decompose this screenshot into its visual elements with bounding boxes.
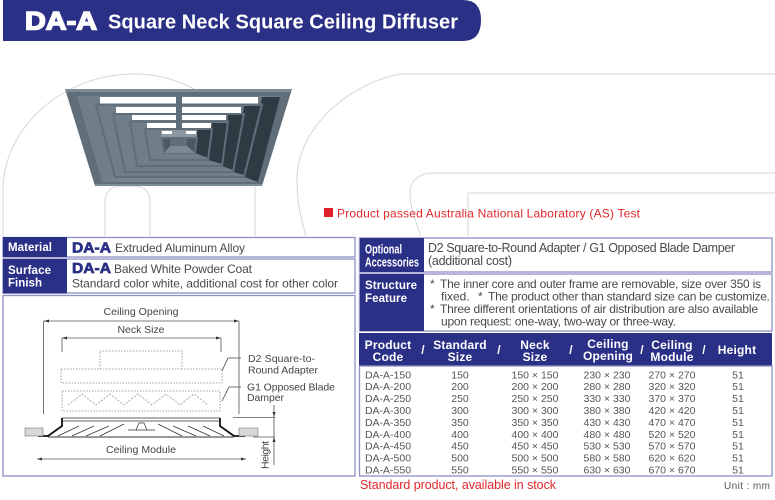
table body: 230 × 230 — [583, 370, 631, 382]
stock note: Standard product, available in stock — [360, 478, 557, 492]
panel: material: DA-A — [72, 240, 111, 256]
product illustration: square ceiling diffuser — [65, 89, 292, 186]
title banner: Square Neck Square Ceiling Diffuser — [108, 12, 458, 34]
title banner: DA-A — [25, 8, 97, 36]
table body: 400 × 400 — [511, 429, 559, 441]
panel: surface finish — [3, 259, 355, 294]
table header: Code — [373, 350, 404, 364]
table header: Ceiling — [587, 337, 629, 351]
panel: material: Extruded Aluminum Alloy — [115, 241, 245, 255]
title banner — [3, 0, 481, 41]
table body: 370 × 370 — [648, 393, 696, 405]
table header: Size — [523, 350, 548, 364]
table body: 250 × 250 — [511, 393, 559, 405]
panel: material — [3, 237, 355, 257]
neck size dimension — [62, 324, 221, 352]
panel: optional accessories: (additional cost) — [428, 254, 512, 268]
panel: structure feature: The inner core and outer frame are removable, size over 350 is — [440, 277, 761, 291]
table body: 580 × 580 — [583, 452, 631, 464]
table body: 550 — [451, 464, 469, 476]
table header — [359, 333, 772, 366]
table body: 51 — [732, 381, 744, 393]
panel: structure feature: * — [430, 302, 435, 316]
table header: Neck — [520, 338, 550, 352]
panel: structure feature: The product other than standard size can be customize. — [488, 290, 770, 304]
callout: G1 damper: G1 Opposed Blade — [247, 382, 335, 394]
table body: 380 × 380 — [583, 405, 631, 417]
table header: Module — [650, 350, 694, 364]
ceiling module dimension — [37, 444, 246, 460]
panel: material: Material — [8, 242, 52, 254]
table body: 250 — [451, 393, 469, 405]
neck size dimension: Neck Size — [118, 324, 165, 336]
D2 adapter dashed outline — [61, 351, 222, 383]
table body: 570 × 570 — [648, 440, 696, 452]
table body: 51 — [732, 452, 744, 464]
table body: 420 × 420 — [648, 405, 696, 417]
panel: structure feature: Three different orientations of air distribution are also available — [440, 302, 758, 316]
panel: optional accessories: Optional — [365, 242, 402, 256]
specification table — [359, 333, 772, 476]
panel: surface finish: Surface — [8, 265, 51, 277]
height dimension — [233, 405, 276, 469]
table body — [360, 366, 772, 476]
table body: 350 × 350 — [511, 417, 559, 429]
table body: 270 × 270 — [648, 370, 696, 382]
table body: 450 × 450 — [511, 440, 559, 452]
panel: structure feature — [360, 274, 772, 331]
panel: optional accessories: D2 Square-to-Round Adapter / G1 Opposed Blade Damper — [428, 241, 735, 255]
table header: / — [421, 343, 425, 357]
table body: DA-A-300 — [365, 405, 411, 417]
table body: DA-A-200 — [365, 381, 411, 393]
table body: 630 × 630 — [583, 464, 631, 476]
table body: 51 — [732, 393, 744, 405]
G1 damper dashed outline — [62, 391, 220, 411]
table body: 300 — [451, 405, 469, 417]
diffuser section — [25, 418, 258, 437]
panel: structure feature: upon request: one-way, two-way or three-way. — [441, 314, 676, 328]
table body: 200 — [451, 381, 469, 393]
unit note: Unit : mm — [724, 481, 770, 492]
table body: 150 × 150 — [511, 370, 559, 382]
callout: D2 adapter: D2 Square-to- — [248, 353, 316, 365]
table header: / — [640, 343, 644, 357]
callout: G1 damper: Damper — [247, 392, 284, 404]
table header: Opening — [583, 349, 633, 363]
panel: optional accessories: Accessories — [365, 256, 419, 270]
table body: 670 × 670 — [648, 464, 696, 476]
table body: 400 — [451, 429, 469, 441]
panel: surface finish: DA-A — [72, 260, 111, 277]
panel: surface finish: Baked White Powder Coat — [114, 262, 253, 276]
table body: DA-A-350 — [365, 417, 411, 429]
panel: dimension diagram — [3, 296, 355, 476]
table body: 51 — [732, 370, 744, 382]
table body: 300 × 300 — [511, 405, 559, 417]
table body: 480 × 480 — [583, 429, 631, 441]
table body: 150 — [451, 370, 469, 382]
panel: surface finish: Finish — [8, 278, 42, 290]
table body: 51 — [732, 464, 744, 476]
test notice: Product passed Australia National Laboratory (AS) Test — [337, 206, 641, 220]
table body: 51 — [732, 405, 744, 417]
callout: D2 adapter — [222, 353, 318, 376]
table body: 430 × 430 — [583, 417, 631, 429]
panel: surface finish: Standard color white, additional cost for other color — [72, 276, 338, 290]
table body: 520 × 520 — [648, 429, 696, 441]
table body: 320 × 320 — [648, 381, 696, 393]
table body: 450 — [451, 440, 469, 452]
table header: / — [702, 343, 706, 357]
table body: DA-A-550 — [365, 464, 411, 476]
ceiling opening dimension: Ceiling Opening — [104, 306, 179, 318]
table body: 550 × 550 — [511, 464, 559, 476]
table body: 470 × 470 — [648, 417, 696, 429]
table body: 530 × 530 — [583, 440, 631, 452]
panel: structure feature: * — [478, 290, 483, 304]
panel: structure feature: * — [430, 277, 435, 291]
panel: structure feature: Feature — [365, 293, 407, 305]
table header: / — [569, 343, 573, 357]
height dimension: Height — [260, 441, 272, 469]
table body: 280 × 280 — [583, 381, 631, 393]
panel: optional accessories — [360, 238, 772, 272]
table body: DA-A-400 — [365, 429, 411, 441]
table body: 51 — [732, 429, 744, 441]
table body: DA-A-500 — [365, 452, 411, 464]
table header: / — [497, 343, 501, 357]
panel: structure feature: fixed. — [441, 290, 470, 304]
table body: DA-A-250 — [365, 393, 411, 405]
table body: DA-A-450 — [365, 440, 411, 452]
ceiling opening dimension — [44, 306, 239, 414]
table header: Standard — [433, 338, 487, 352]
ceiling module dimension: Ceiling Module — [106, 444, 176, 456]
table body: 330 × 330 — [583, 393, 631, 405]
table body: DA-A-150 — [365, 370, 411, 382]
table body: 350 — [451, 417, 469, 429]
table body: 620 × 620 — [648, 452, 696, 464]
table body: 51 — [732, 440, 744, 452]
callout: G1 damper — [222, 382, 335, 404]
table body: 200 × 200 — [511, 381, 559, 393]
table header: Height — [718, 343, 756, 357]
table header: Product — [365, 338, 411, 352]
table body: 500 × 500 — [511, 452, 559, 464]
callout: D2 adapter: Round Adapter — [248, 364, 318, 376]
table body: 500 — [451, 452, 469, 464]
panel: structure feature: Structure — [365, 280, 417, 292]
table header: Size — [448, 350, 473, 364]
table body: 51 — [732, 417, 744, 429]
table header: Ceiling — [651, 338, 693, 352]
